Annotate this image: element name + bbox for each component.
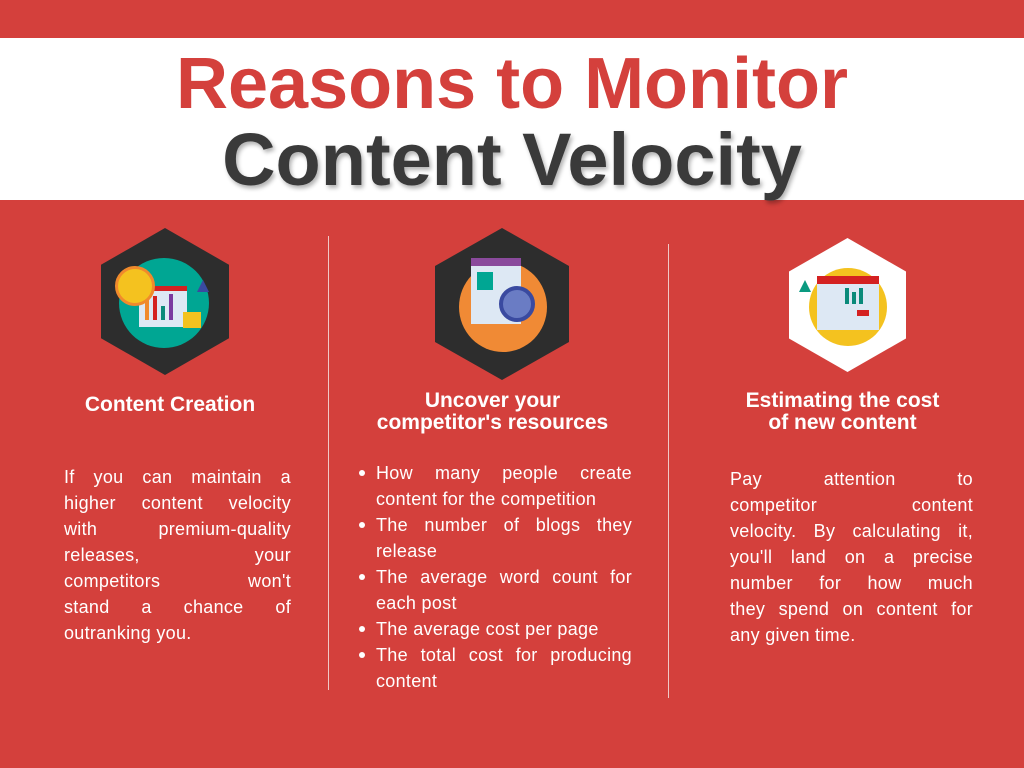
bullet list [359,463,632,691]
bullet list: The average cost per page [376,619,599,639]
text: estimating cost: you'll land on a precise [730,547,973,567]
text: estimating cost: they spend on content for [730,599,973,619]
bullet list: each post [376,593,457,613]
bullet list: The average word count for [376,567,632,587]
heading: estimating cost: of new content [768,411,917,434]
icon: content creation [101,228,229,375]
text: estimating cost: Pay attention to [730,469,973,489]
bullet list: content [376,671,437,691]
heading: uncover resources [377,389,608,434]
text: content creation: higher content velocity [64,493,291,513]
text: content creation: with premium-quality [64,519,291,539]
bullet list: content for the competition [376,489,596,509]
text: estimating cost: velocity. By calculating it, [730,521,973,541]
title line 1: Reasons to Monitor [176,44,848,124]
text: content creation: If you can maintain a [64,467,291,487]
heading: content creation: Content Creation [85,393,255,416]
bullet list: How many people create [376,463,632,483]
bullet list: The total cost for producing [376,645,632,665]
text: content creation [64,467,291,643]
text: estimating cost [730,469,973,645]
title line 2: Content Velocity [222,118,802,201]
bullet list: release [376,541,437,561]
title band [0,38,1024,200]
text: content creation: competitors won't [64,571,291,591]
icon: uncover resources [435,228,569,380]
heading: estimating cost [746,389,940,434]
icon: estimating cost [789,238,906,372]
heading: uncover resources: competitor's resources [377,411,608,434]
text: estimating cost: any given time. [730,625,856,645]
text: estimating cost: competitor content [730,495,973,515]
text: content creation: outranking you. [64,623,192,643]
heading: estimating cost: Estimating the cost [746,389,939,412]
bullet list: The number of blogs they [376,515,632,535]
text: content creation: releases, your [64,545,291,565]
text: content creation: stand a chance of [64,597,291,617]
text: estimating cost: number for how much [730,573,973,593]
heading: uncover resources: Uncover your [425,389,560,412]
